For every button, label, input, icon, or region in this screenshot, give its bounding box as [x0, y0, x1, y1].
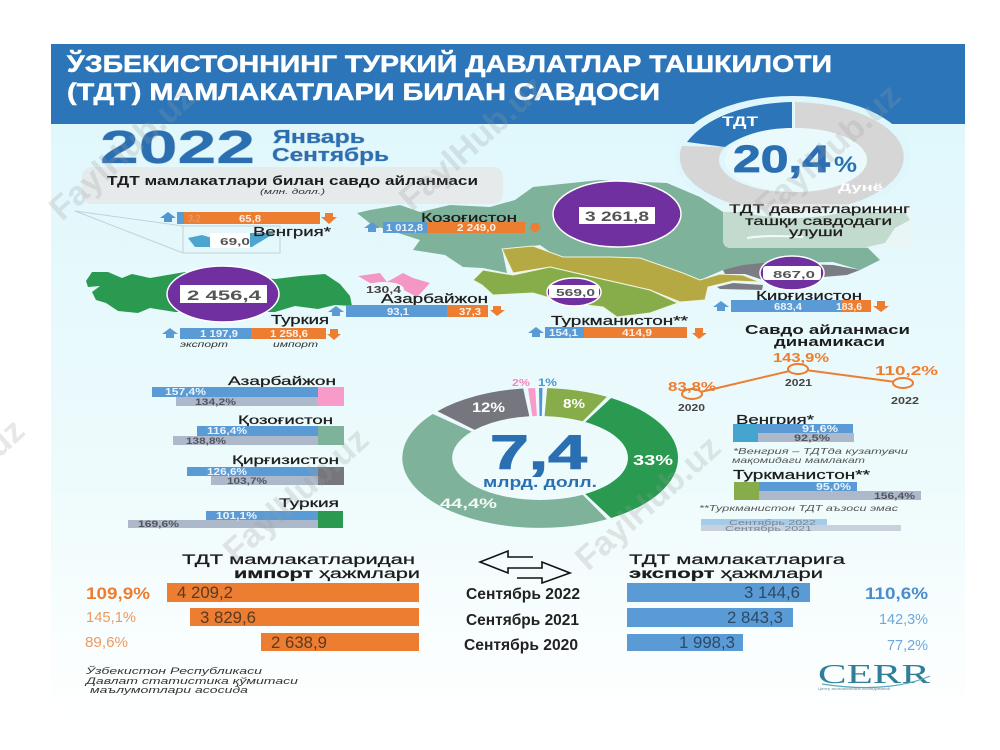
- Azerbaijan block: Азарбайжон: [381, 291, 488, 306]
- legend: September 2022 and 2021: Сентябрь 2022: [729, 518, 816, 527]
- bar group: Azerbaijan growth: [152, 374, 344, 407]
- segment: world: [680, 102, 904, 212]
- Turkmenistan block: Туркманистон**: [551, 313, 688, 328]
- line chart: turnover dynamics: 143,9%: [773, 350, 830, 365]
- donut: trade structure 7.4 bn: 44,4%: [440, 495, 498, 511]
- bar group: Kazakhstan growth: [173, 413, 344, 446]
- bar group: Azerbaijan growth: 134,2%: [195, 397, 236, 407]
- bubble: Kazakhstan total: [553, 181, 681, 247]
- heading: import volumes: [182, 552, 420, 581]
- bar group: Kazakhstan growth: Қозоғистон: [238, 413, 333, 427]
- donut: trade structure 7.4 bn: млрд. долл.: [483, 475, 597, 491]
- bar group: Hungary growth: 92,5%: [794, 433, 830, 443]
- donut: trade structure 7.4 bn: 1%: [538, 377, 557, 389]
- Turkey block: 1 258,6: [270, 329, 308, 340]
- title: ЎЗБЕКИСТОННИНГ ТУРКИЙ ДАВЛАТЛАР ТАШКИЛОТИ: [66, 50, 832, 78]
- map: Kazakhstan: [357, 180, 910, 280]
- period labels: Сентябрь 2020: [464, 637, 578, 654]
- bar chart: export: [627, 583, 928, 654]
- donut: trade structure 7.4 bn: 8%: [563, 396, 586, 411]
- bar group: Turkmenistan growth: 156,4%: [874, 491, 915, 501]
- date heading: 2022 January-September: Сентябрь: [272, 145, 389, 165]
- Turkmenistan block: [528, 278, 707, 339]
- Kazakhstan block: 3 261,8: [585, 208, 649, 224]
- line chart: turnover dynamics: 83,8%: [668, 379, 717, 394]
- bubble: Kyrgyzstan total: [760, 256, 824, 290]
- Azerbaijan block: 93,1: [387, 307, 409, 318]
- Turkmenistan block: 414,9: [622, 328, 653, 339]
- line chart: turnover dynamics: 2020: [678, 403, 706, 414]
- segment: TDT: [687, 102, 792, 147]
- heading: import volumes: ТДТ мамлакатларидан: [182, 552, 415, 567]
- Azerbaijan block: 130,4: [366, 285, 402, 296]
- bar chart: export: 77,2%: [887, 637, 928, 654]
- heading: export volumes: [629, 552, 846, 581]
- Turkey block: [162, 266, 341, 349]
- icon: exchange arrows: [480, 551, 570, 583]
- subtitle box: trade turnover: ТДТ мамлакатлари билан савдо айланмаси: [107, 174, 478, 188]
- bubble: Turkey total: [167, 266, 279, 322]
- note: Hungary observer status: [732, 446, 908, 465]
- Turkey block: экспорт: [180, 339, 228, 349]
- map: Uzbekistan: [502, 246, 760, 302]
- callout: TDT share caption: [723, 202, 912, 248]
- bar group: Turkmenistan growth: 95,0%: [816, 482, 851, 493]
- date heading: 2022 January-September: Январь: [273, 127, 365, 147]
- donut: trade structure 7.4 bn: 12%: [472, 399, 506, 415]
- Kyrgyzstan block: [713, 256, 889, 313]
- bar chart: import: 145,1%: [86, 609, 136, 626]
- bar chart: import: 3 829,6: [200, 608, 256, 627]
- Turkmenistan block: 569,0: [556, 288, 596, 299]
- subtitle box: trade turnover: (млн. долл.): [260, 187, 326, 196]
- Kyrgyzstan block: Қирғизистон: [756, 288, 862, 303]
- source note: маълумотлари асосида: [90, 685, 248, 695]
- segment: Kyrgyzstan 12%: [438, 388, 529, 430]
- Turkey block: Туркия: [271, 312, 329, 327]
- map: Turkey: [86, 272, 352, 313]
- bar group: Turkmenistan growth: Туркманистон**: [733, 467, 870, 482]
- bar group: Turkey growth: 101,1%: [216, 511, 257, 522]
- bar chart: export: 3 144,6: [744, 583, 800, 602]
- Turkey block: импорт: [273, 339, 318, 349]
- period labels: Сентябрь 2022: [466, 586, 580, 603]
- note: Hungary observer status: *Венгрия – ТДТда кузатувчи: [733, 446, 908, 456]
- donut hole: [725, 128, 867, 192]
- heading: export volumes: экспорт ҳажмлари: [629, 566, 823, 581]
- segment: Azerbaijan 2%: [528, 388, 537, 416]
- Hungary block: Венгрия*: [253, 224, 331, 239]
- donut: trade structure 7.4 bn: 7,4: [490, 427, 587, 480]
- bar group: Turkmenistan growth: [733, 467, 921, 501]
- source note: Ўзбекистон Республикаси: [84, 665, 262, 676]
- line chart: turnover dynamics: 2022: [891, 396, 920, 407]
- map: Azerbaijan: [358, 273, 430, 297]
- bar group: Azerbaijan growth: Азарбайжон: [228, 374, 336, 388]
- heading: export volumes: ТДТ мамлакатларига: [629, 552, 846, 567]
- bar group: Hungary growth: Венгрия*: [736, 412, 814, 427]
- watermarks: [0, 68, 908, 578]
- bar chart: export: 110,6%: [865, 584, 928, 603]
- Turkey block: 1 197,9: [200, 329, 238, 340]
- source note: Давлат статистика қўмитаси: [84, 676, 298, 686]
- legend: September 2022 and 2021: [701, 518, 901, 533]
- donut: TDT share of foreign trade: 20,4: [733, 139, 830, 181]
- bar group: Kyrgyzstan growth: [187, 453, 344, 486]
- logo: CERR: CERR: [818, 659, 930, 689]
- bar group: Hungary growth: [733, 412, 854, 443]
- Kyrgyzstan block: 683,4: [774, 302, 802, 313]
- title: (ТДТ) МАМЛАКАТЛАРИ БИЛАН САВДОСИ: [67, 79, 660, 106]
- donut: TDT share of foreign trade: Дунё: [838, 182, 883, 194]
- Kazakhstan block: 2 249,0: [457, 223, 496, 234]
- heading: turnover dynamics: [745, 323, 910, 349]
- map: lake: [533, 245, 550, 257]
- Kyrgyzstan block: 867,0: [773, 269, 815, 281]
- heading: turnover dynamics: Савдо айланмаси: [745, 323, 910, 337]
- donut: trade structure 7.4 bn: 33%: [633, 452, 673, 469]
- bar chart: import: 109,9%: [86, 584, 150, 603]
- Azerbaijan block: [328, 282, 505, 318]
- subtitle box: trade turnover: [82, 167, 503, 204]
- segment: Turkey 33%: [585, 398, 678, 518]
- Hungary block: 69,0: [220, 237, 251, 248]
- watermarks: FaylHub.uz: [748, 76, 908, 226]
- map: Tajikistan: [717, 283, 763, 290]
- bar group: Turkey growth: Туркия: [279, 496, 339, 510]
- Turkey block: 2 456,4: [187, 287, 261, 303]
- legend: September 2022 and 2021: Сентябрь 2021: [725, 524, 812, 533]
- Hungary block: 3,2: [188, 214, 201, 224]
- bubble: Turkmenistan total: [547, 278, 601, 306]
- watermarks: FaylHub.uz: [568, 428, 728, 578]
- bar group: Kazakhstan growth: 138,8%: [186, 436, 226, 446]
- line chart: turnover dynamics: 2021: [785, 378, 813, 389]
- Azerbaijan block: 37,3: [459, 307, 481, 318]
- bar chart: import: 4 209,2: [177, 583, 233, 602]
- bar group: Azerbaijan growth: 157,4%: [165, 387, 206, 398]
- line chart: turnover dynamics: [668, 350, 939, 414]
- bar chart: export: 1 998,3: [679, 633, 735, 652]
- Kazakhstan block: [364, 181, 681, 247]
- bar group: Turkey growth: [128, 496, 343, 529]
- panel: background: [51, 100, 965, 720]
- header band: [51, 44, 965, 124]
- Turkmenistan block: 154,1: [549, 328, 579, 339]
- date heading: 2022 January-September: 2022: [100, 121, 255, 173]
- watermarks: FaylHub.uz: [42, 78, 202, 228]
- bar group: Turkey growth: 169,6%: [138, 519, 179, 529]
- donut: TDT share of foreign trade: %: [834, 152, 857, 177]
- bar group: Kyrgyzstan growth: 103,7%: [227, 476, 267, 486]
- line chart: turnover dynamics: 110,2%: [875, 363, 939, 378]
- logo: CERR: [818, 659, 930, 691]
- donut: TDT share of foreign trade: ТДТ: [722, 113, 759, 129]
- bar chart: import: 89,6%: [85, 634, 128, 651]
- bar chart: import: [85, 583, 419, 652]
- Hungary block: [75, 211, 337, 253]
- map: Turkmenistan: [473, 267, 678, 317]
- Kazakhstan block: Қозоғистон: [421, 210, 517, 225]
- date heading: 2022 January-September: [100, 121, 389, 173]
- title: [66, 50, 832, 106]
- bar group: Kazakhstan growth: 116,4%: [207, 426, 247, 437]
- bar group: Hungary growth: 91,6%: [802, 424, 838, 435]
- bar chart: export: 2 843,3: [727, 608, 783, 627]
- segment: Turkmenistan 8%: [545, 388, 607, 421]
- Kyrgyzstan block: 183,6: [836, 302, 862, 313]
- donut: trade structure 7.4 bn: 2%: [512, 378, 530, 389]
- segment: Hungary 1%: [539, 388, 542, 416]
- callout: TDT share caption: улуши: [789, 225, 843, 239]
- watermarks: FaylHub.uz: [392, 68, 552, 218]
- donut: TDT share of foreign trade: [675, 96, 911, 218]
- logo: CERR: Центр экономических исследований: [818, 686, 890, 691]
- bar chart: export: 142,3%: [879, 611, 928, 628]
- note: Hungary observer status: мақомидаги мамлакат: [732, 455, 865, 465]
- callout: TDT share caption: ТДТ давлатларининг: [729, 202, 911, 216]
- callout: TDT share caption: ташқи савдодаги: [745, 214, 892, 228]
- donut: trade structure 7.4 bn: [402, 377, 678, 528]
- note: Turkmenistan not a member: **Туркманистон ТДТ аъзоси эмас: [699, 503, 899, 513]
- source note: [84, 665, 298, 695]
- bar chart: import: 2 638,9: [271, 633, 327, 652]
- segment: Kazakhstan 44.4%: [402, 414, 607, 528]
- heading: turnover dynamics: динамикаси: [774, 335, 885, 349]
- map: Kyrgyzstan: [723, 263, 860, 285]
- watermarks: FaylHub.uz: [216, 420, 376, 570]
- period labels: [464, 586, 580, 654]
- bar group: Kyrgyzstan growth: Қирғизистон: [232, 453, 339, 467]
- Kazakhstan block: 1 012,8: [386, 223, 423, 234]
- period labels: Сентябрь 2021: [466, 612, 579, 629]
- bar group: Kyrgyzstan growth: 126,6%: [207, 467, 247, 478]
- heading: import volumes: импорт ҳажмлари: [234, 566, 420, 581]
- Hungary block: 65,8: [239, 214, 261, 225]
